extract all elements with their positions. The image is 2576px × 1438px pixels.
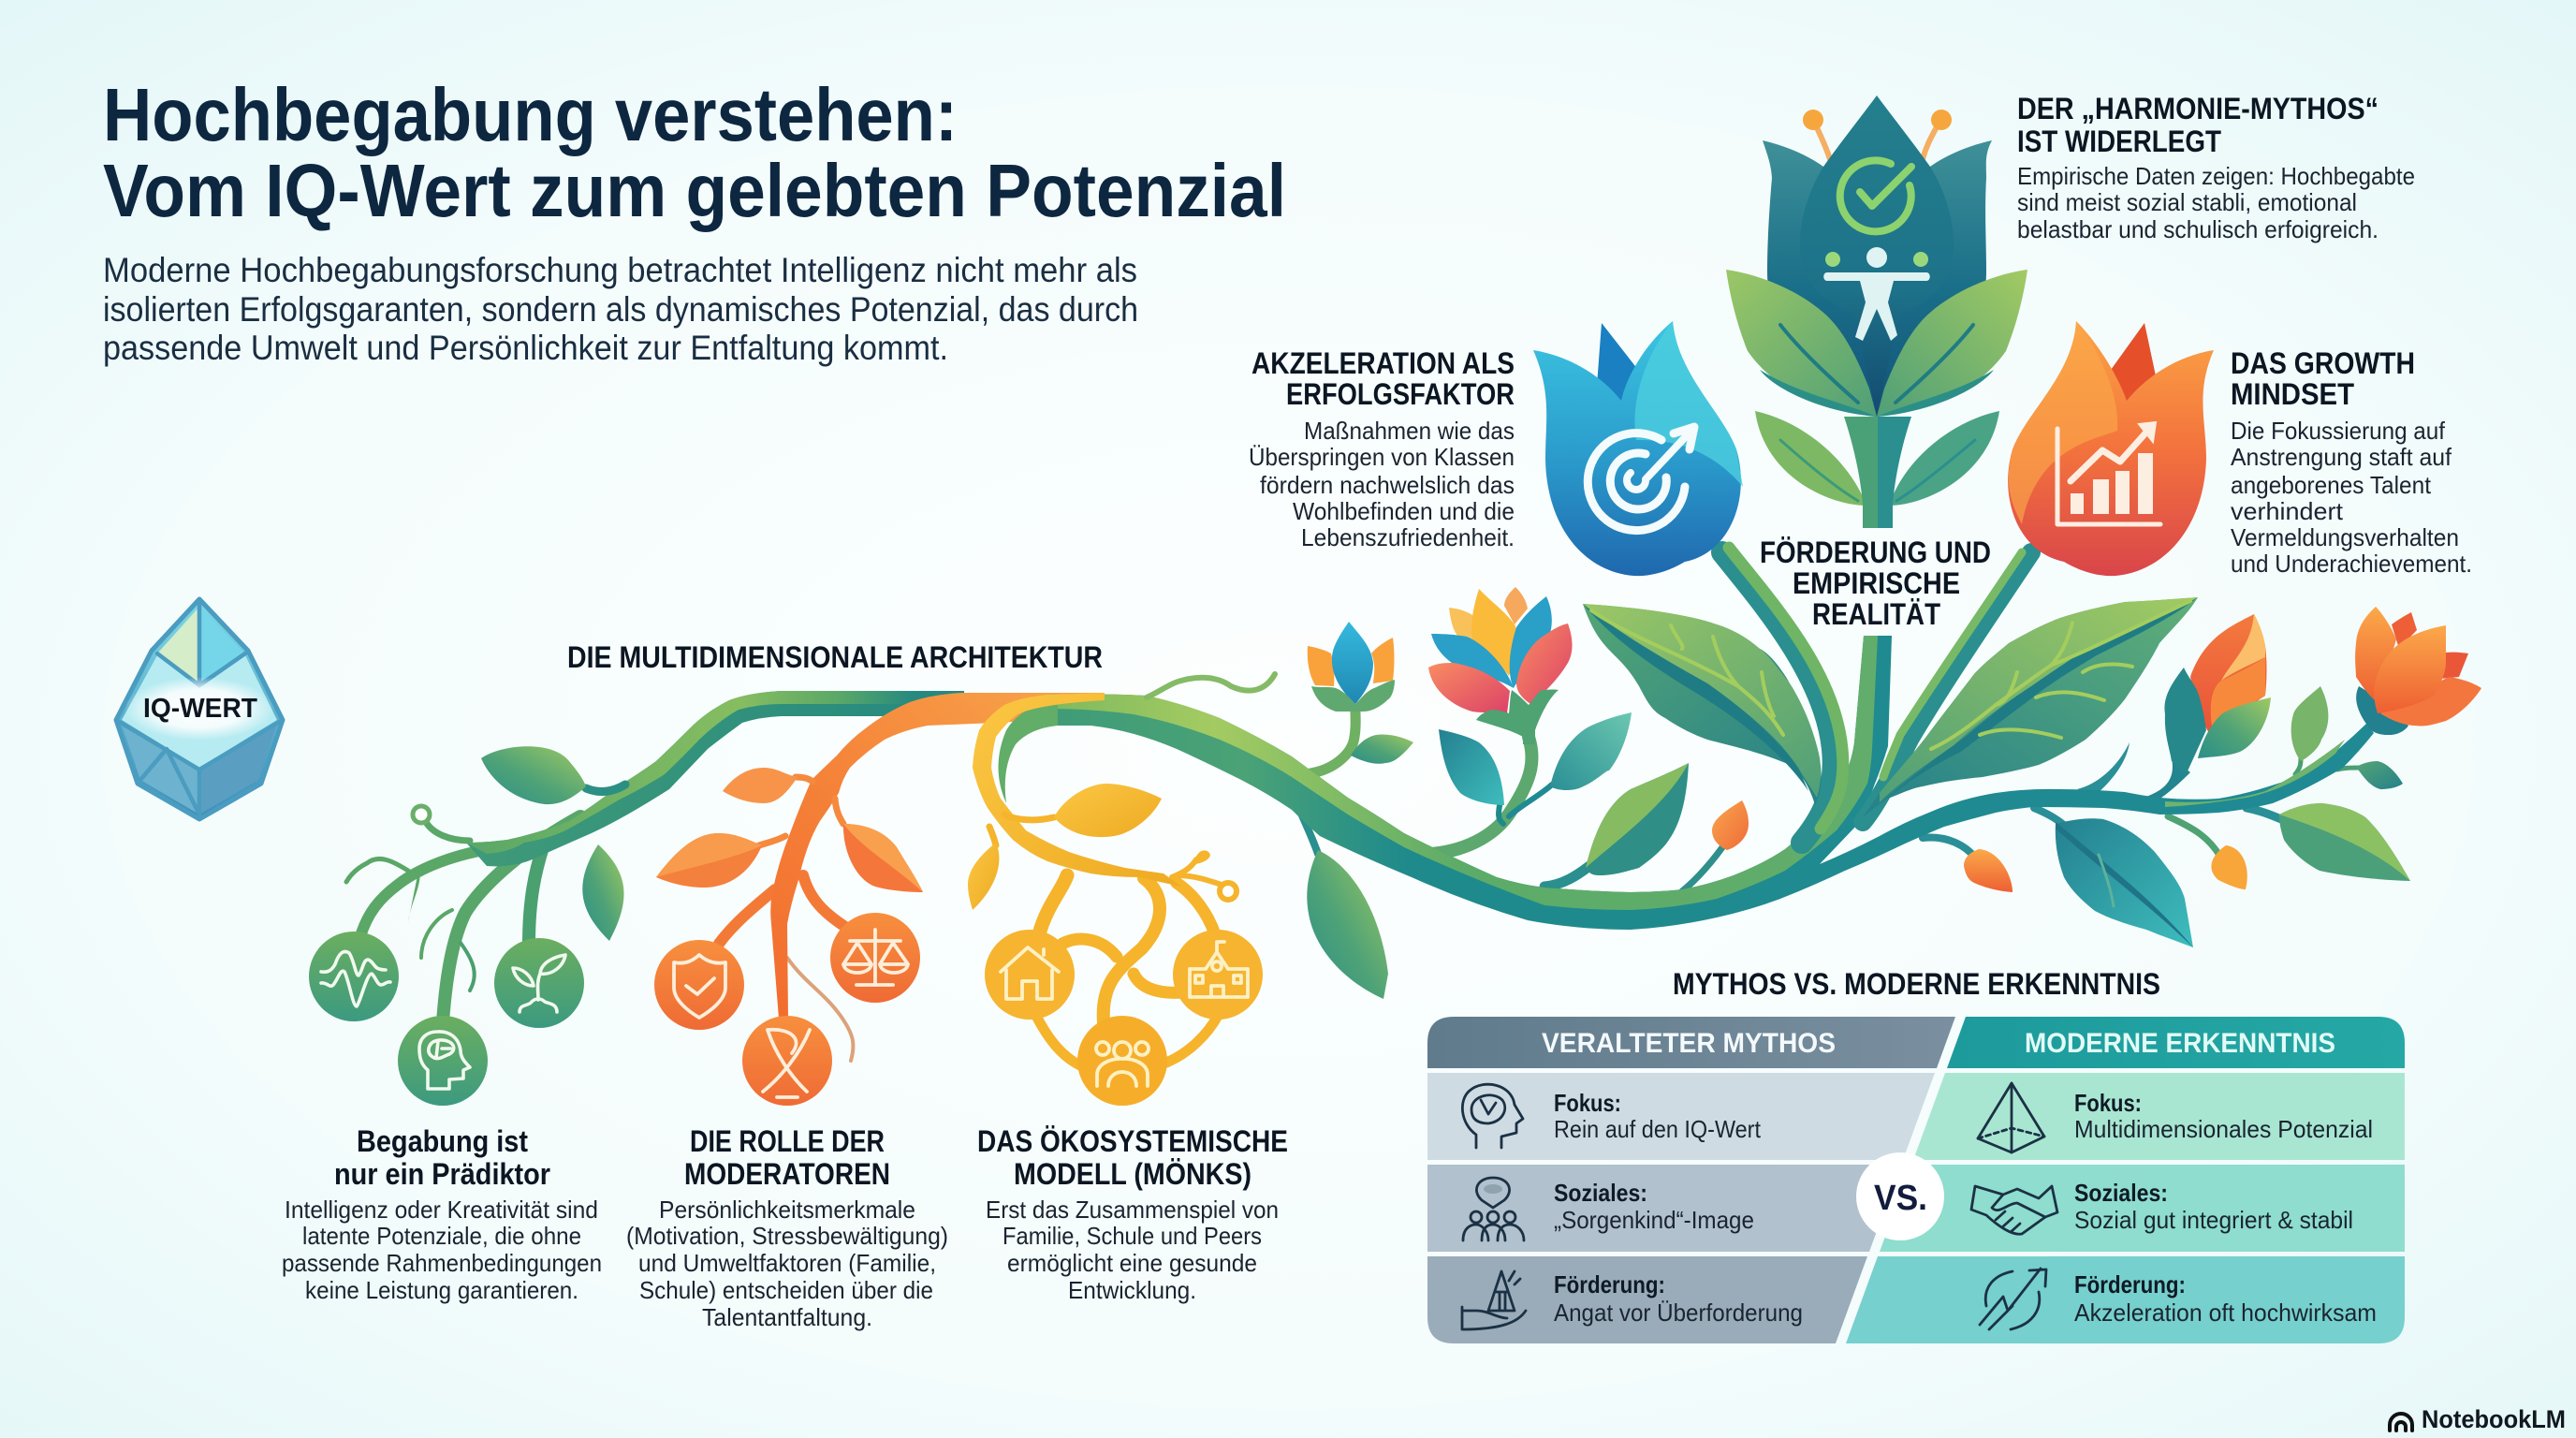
icon: shield	[674, 955, 725, 1018]
text: Harmonie-Mythos	[2017, 92, 2415, 243]
left column: Fokus:	[1554, 1089, 1621, 1117]
text: Harmonie-Mythos: Empirische Daten zeigen: Hochbegabte	[2017, 162, 2415, 190]
intro text: isolierten Erfolgsgaranten, sondern als dynamisches Potenzial, das durch	[103, 290, 1138, 329]
central flower	[1726, 95, 2027, 417]
text: Ökosystemisches Modell: Erst das Zusammenspiel von	[986, 1196, 1279, 1224]
VS badge	[1856, 1152, 1944, 1240]
left column	[1427, 1017, 1955, 1343]
text: Growth Mindset: und Underachievement.	[2231, 550, 2472, 578]
right column: MODERNE ERKENNTNIS	[2025, 1028, 2335, 1059]
blue tulip	[1533, 321, 1743, 576]
intro text	[103, 251, 1138, 367]
text: Begabung: Intelligenz oder Kreativität sind	[285, 1196, 598, 1224]
title: Vom IQ-Wert zum gelebten Potenzial	[103, 149, 1286, 232]
title: Hochbegabung verstehen:	[103, 73, 958, 156]
main vine	[1047, 636, 2374, 999]
panel: comparison table	[1427, 1017, 2405, 1343]
text: Moderatoren: Talentantfaltung.	[702, 1303, 872, 1331]
intro text: passende Umwelt und Persönlichkeit zur Entfaltung kommt.	[103, 329, 948, 367]
leaf	[1550, 712, 1632, 790]
text: Moderatoren: DIE ROLLE DER	[690, 1124, 885, 1158]
left column: Soziales:	[1554, 1179, 1647, 1207]
text: Growth Mindset: DAS GROWTH	[2231, 346, 2415, 380]
heading: centre: FÖRDERUNG UND	[1760, 536, 1991, 569]
text: Growth Mindset: Anstrengung staft auf	[2231, 443, 2452, 471]
text: Moderatoren: (Motivation, Stressbewältigung)	[626, 1222, 948, 1250]
yellow branch	[968, 693, 1237, 1067]
text: Ökosystemisches Modell: Entwicklung.	[1068, 1276, 1196, 1304]
green lower leaf	[2279, 803, 2410, 881]
heading: comparison: MYTHOS VS. MODERNE ERKENNTNIS	[1673, 967, 2160, 1001]
bud	[1712, 800, 1749, 850]
text: Akzeleration: Maßnahmen wie das	[1304, 417, 1515, 445]
text: Growth Mindset: angeborenes Talent	[2231, 471, 2432, 499]
leaf	[1054, 784, 1162, 837]
text: Harmonie-Mythos: DER „HARMONIE-MYTHOS“	[2017, 92, 2378, 125]
big orange flower	[2355, 607, 2481, 735]
orange bud with leaves	[2164, 614, 2271, 775]
tendril: sprout	[1147, 674, 1275, 697]
tulip stems and big leaves	[1583, 548, 2198, 843]
icon: head with brain	[419, 1032, 470, 1089]
heading: centre: EMPIRISCHE	[1793, 566, 1960, 600]
icon: check circle	[1840, 160, 1911, 231]
left leaf	[1726, 270, 1877, 417]
amber bud	[2211, 845, 2247, 889]
text: Begabung: keine Leistung garantieren.	[305, 1276, 578, 1304]
text: Harmonie-Mythos: belastbar und schulisch erfoigreich.	[2017, 215, 2378, 243]
right column: Akzeleration oft hochwirksam	[2074, 1299, 2377, 1327]
single leaf	[2291, 686, 2328, 761]
text: Akzeleration: ERFOLGSFAKTOR	[1286, 377, 1515, 411]
right flowers and leaves	[1964, 607, 2481, 947]
icon: crossed swords	[763, 1030, 810, 1097]
text: Moderatoren: Persönlichkeitsmerkmale	[659, 1196, 915, 1224]
text: Akzeleration: AKZELERATION ALS	[1251, 346, 1515, 380]
text: Harmonie-Mythos: sind meist sozial stabli, emotional	[2017, 188, 2357, 216]
text: Ökosystemisches Modell: MODELL (MÖNKS)	[1014, 1157, 1251, 1191]
heading: centre	[1760, 536, 1991, 631]
text: Moderatoren: und Umweltfaktoren (Familie,	[638, 1249, 936, 1277]
icon: head with brain	[1462, 1084, 1523, 1148]
logo: NotebookLM: NotebookLM	[2422, 1405, 2566, 1433]
icon: sprout	[513, 955, 565, 1012]
left column: VERALTETER MYTHOS	[1542, 1028, 1836, 1059]
left column: „Sorgenkind“-Image	[1554, 1206, 1754, 1234]
text: Akzeleration: Wohlbefinden und die	[1293, 497, 1515, 525]
green circles with icons	[309, 932, 584, 1106]
title	[103, 73, 1286, 232]
VS badge: VS.	[1874, 1179, 1927, 1218]
text: Growth Mindset	[2231, 346, 2472, 578]
left column: Rein auf den IQ-Wert	[1554, 1115, 1762, 1143]
icon: rising chart	[2057, 422, 2160, 524]
label: IQ-Wert: IQ-WERT	[143, 694, 257, 724]
icon: handshake	[1971, 1186, 2057, 1234]
icon: house	[1001, 947, 1059, 999]
text: Moderatoren: MODERATOREN	[684, 1157, 890, 1191]
text: Begabung	[282, 1124, 602, 1304]
green branch	[346, 691, 964, 1022]
orange tulip	[2008, 321, 2214, 576]
icon: pulse wave	[321, 951, 390, 1006]
icon: scales	[843, 930, 908, 985]
left column: Förderung:	[1554, 1270, 1665, 1299]
text: Ökosystemisches Modell: Familie, Schule und Peers	[1003, 1222, 1262, 1250]
big right leaf	[1863, 597, 2198, 817]
icon: people figure	[1823, 247, 1930, 341]
yellow circles with icons	[985, 674, 1275, 1106]
left column: Angat vor Überforderung	[1554, 1299, 1803, 1327]
text: Growth Mindset: MINDSET	[2231, 377, 2354, 411]
intro text: Moderne Hochbegabungsforschung betrachtet Intelligenz nicht mehr als	[103, 251, 1137, 289]
right column: Fokus:	[2074, 1089, 2142, 1117]
text: Akzeleration: Überspringen von Klassen	[1249, 443, 1515, 471]
big left leaf	[1583, 604, 1822, 805]
text: Begabung: Begabung ist	[357, 1124, 528, 1158]
flower cluster	[1428, 587, 1749, 875]
text: Begabung: nur ein Prädiktor	[334, 1157, 550, 1191]
text: Ökosystemisches Modell: DAS ÖKOSYSTEMISCHE	[977, 1124, 1288, 1158]
text: Growth Mindset: verhindert	[2231, 497, 2344, 525]
icon: worried group	[1463, 1178, 1524, 1240]
text: Akzeleration: fördern nachwelslich das	[1260, 471, 1515, 499]
right column: Soziales:	[2074, 1179, 2168, 1207]
leaf	[843, 824, 923, 892]
text: Ökosystemisches Modell	[977, 1124, 1288, 1304]
leaf	[1586, 763, 1689, 875]
icon: rising arrow	[1980, 1269, 2046, 1329]
small round leaf	[2356, 761, 2403, 789]
leaf	[582, 844, 624, 941]
heading: centre: REALITÄT	[1812, 597, 1940, 631]
icon: target with arrow	[1588, 427, 1694, 531]
leaf	[1439, 729, 1504, 805]
icon: IQ gem	[116, 599, 283, 819]
text: Begabung: passende Rahmenbedingungen	[282, 1249, 602, 1277]
right column	[1846, 1017, 2405, 1343]
orange branch	[656, 693, 1105, 1061]
small central leaves and stalk	[1755, 411, 1999, 528]
text: Harmonie-Mythos: IST WIDERLEGT	[2017, 125, 2221, 158]
lower vine leaf	[1307, 850, 1388, 999]
text: Akzeleration: Lebenszufriedenheit.	[1301, 523, 1515, 551]
leaf	[968, 843, 999, 910]
orange circles with icons	[654, 913, 920, 1106]
icon: people	[1097, 1059, 1148, 1086]
text: Ökosystemisches Modell: ermöglicht eine gesunde	[1007, 1249, 1257, 1277]
right leaf	[1877, 270, 2027, 417]
right column: Förderung:	[2074, 1270, 2186, 1299]
orange leaf bud	[1964, 849, 2012, 892]
leaf	[481, 746, 586, 804]
text: Growth Mindset: Vermeldungsverhalten	[2231, 523, 2459, 551]
text: Growth Mindset: Die Fokussierung auf	[2231, 417, 2446, 445]
text: Begabung: latente Potenziale, die ohne	[302, 1222, 581, 1250]
right column: Sozial gut integriert & stabil	[2074, 1206, 2353, 1234]
leaf	[723, 768, 798, 803]
icon: hand with tower	[1462, 1271, 1526, 1329]
teal lower leaf	[2056, 818, 2193, 947]
heading: multidimensional architecture: DIE MULTIDIMENSIONALE ARCHITEKTUR	[567, 640, 1103, 674]
text: Moderatoren	[626, 1124, 948, 1331]
text: Moderatoren: Schule) entscheiden über die	[639, 1276, 933, 1304]
small upper bud	[1308, 622, 1413, 764]
leaf	[656, 833, 762, 888]
right column: Multidimensionales Potenzial	[2074, 1115, 2373, 1143]
icon: school	[1190, 942, 1248, 997]
icon: pyramid	[1978, 1083, 2044, 1152]
text: Akzeleration	[1249, 346, 1515, 551]
